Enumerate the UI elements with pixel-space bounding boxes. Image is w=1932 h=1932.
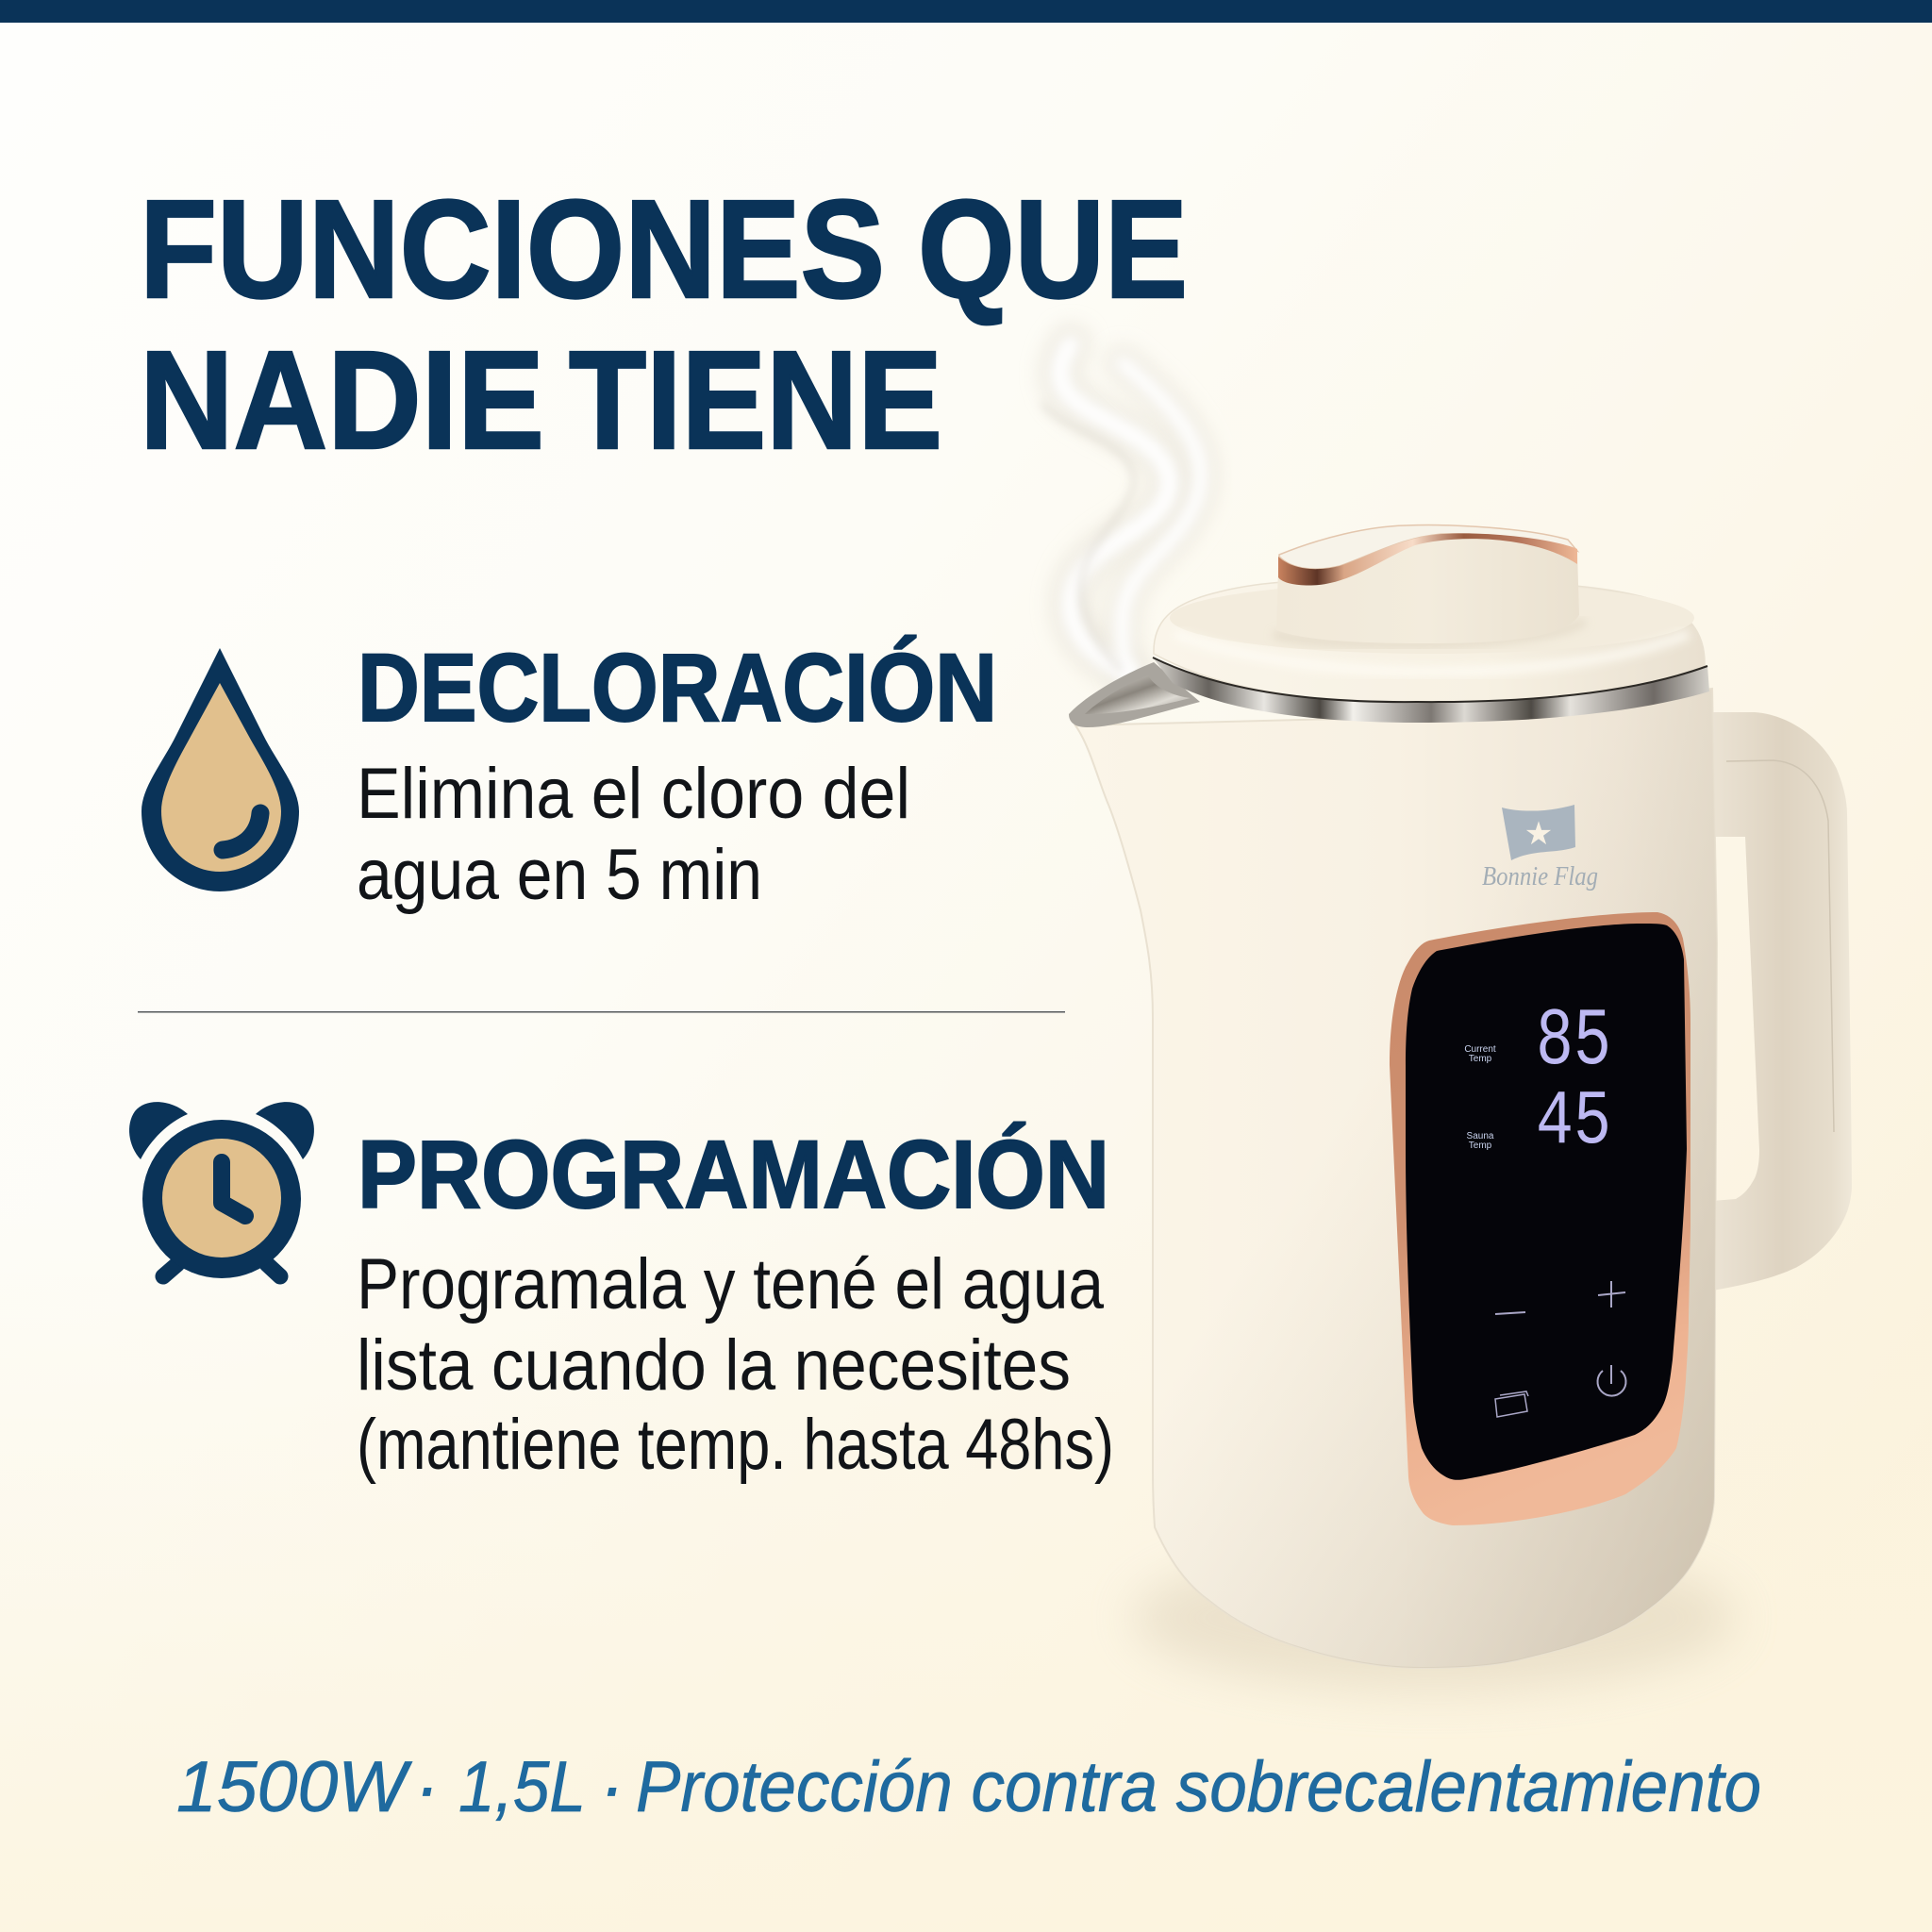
touch icons — [1495, 1281, 1626, 1417]
footer specs: · — [600, 1747, 624, 1827]
top navy bar — [0, 0, 1932, 23]
logo: bonnie flag: ★ — [1524, 816, 1553, 852]
lid — [1154, 580, 1705, 702]
kettle — [1043, 344, 1852, 1691]
footer specs: Protección contra sobrecalentamiento — [636, 1747, 1761, 1827]
footer specs: 1,5L — [458, 1747, 586, 1827]
panel: black display — [1406, 924, 1687, 1480]
panel: copper frame — [1390, 912, 1690, 1525]
logo: bonnie flag: Bonnie Flag — [1482, 862, 1598, 891]
icon: water drop — [142, 648, 299, 891]
heading: decloración: DECLORACIÓN — [358, 634, 997, 741]
description: decloración: agua en 5 min — [357, 835, 762, 915]
description: decloración: Elimina el cloro del — [357, 754, 910, 834]
title: QUE — [918, 172, 1188, 327]
description: programación: lista cuando la necesites — [357, 1325, 1071, 1406]
display labels: Sauna — [1467, 1131, 1494, 1141]
display labels — [1464, 1044, 1496, 1151]
title: NADIE — [140, 323, 544, 478]
section: decloración — [357, 634, 997, 915]
description: programación: Programala y tené el agua — [357, 1244, 1105, 1324]
control panel — [1390, 912, 1690, 1525]
heading: programación: PROGRAMACIÓN — [358, 1121, 1109, 1228]
icon: alarm clock — [129, 1102, 314, 1278]
chrome ring — [1153, 658, 1709, 723]
display labels: Current — [1464, 1044, 1496, 1055]
readout: 45 — [1536, 1078, 1611, 1166]
display labels: Temp — [1469, 1054, 1492, 1064]
floor shadow — [1132, 1544, 1736, 1691]
readout: 85 — [1536, 995, 1611, 1088]
footer specs: · — [415, 1747, 439, 1827]
logo: bonnie flag — [1482, 805, 1598, 891]
knob — [1274, 525, 1585, 644]
footer specs: 1500W — [176, 1747, 412, 1827]
description: programación: (mantiene temp. hasta 48hs) — [357, 1405, 1114, 1485]
reflection — [1607, 934, 1624, 1274]
display labels: Temp — [1469, 1141, 1492, 1151]
readout — [1536, 995, 1611, 1166]
section: programación — [357, 1121, 1114, 1485]
divider — [138, 1011, 1065, 1013]
title: FUNCIONES — [140, 172, 885, 327]
body — [1075, 689, 1717, 1668]
spout — [1069, 662, 1200, 727]
steam — [1043, 344, 1201, 675]
handle — [1712, 712, 1852, 1291]
title: TIENE — [569, 323, 942, 478]
title — [140, 172, 1188, 478]
